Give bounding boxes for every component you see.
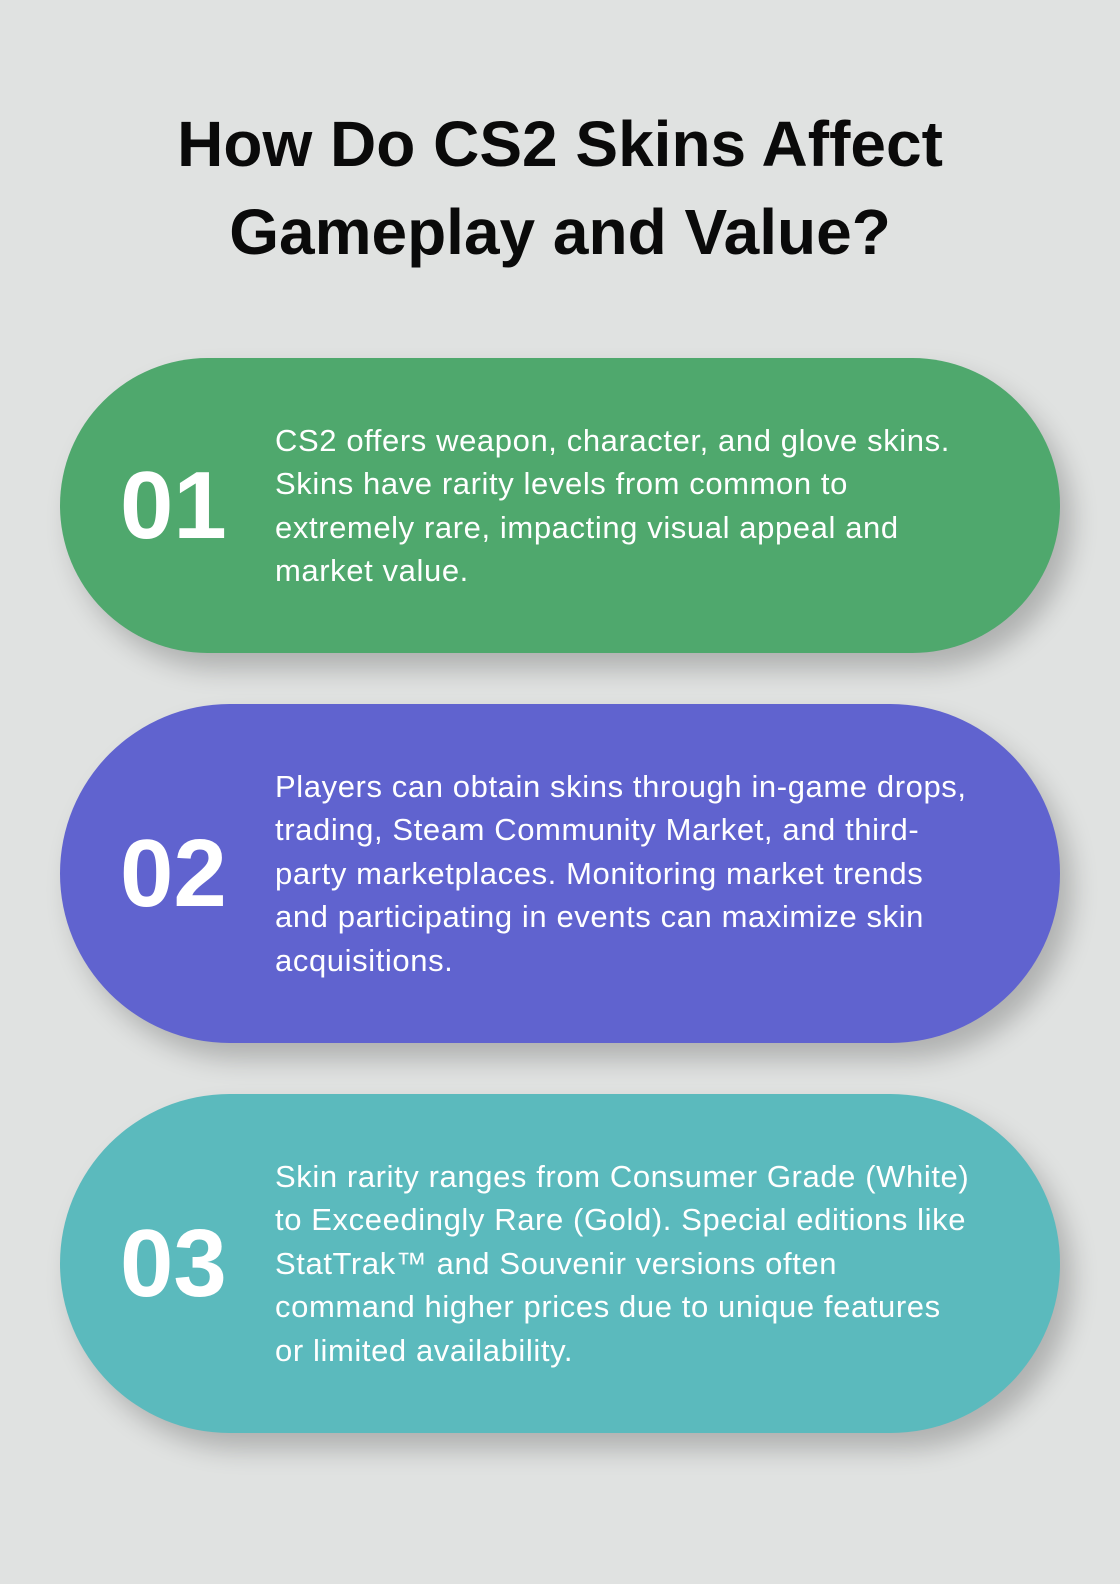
text block 01: market value. <box>275 553 469 588</box>
text block 01: extremely rare, impacting visual appeal and <box>275 510 899 544</box>
title <box>177 108 943 268</box>
text block 03 <box>275 1159 969 1368</box>
text block 01: Skins have rarity levels from common to <box>275 466 848 501</box>
text block 02: acquisitions. <box>275 943 453 978</box>
text block 03: Skin rarity ranges from Consumer Grade (White) <box>275 1159 969 1194</box>
panel: step 02 <box>60 704 1060 1043</box>
number 02: 02 <box>120 820 227 926</box>
text block 03: or limited availability. <box>275 1333 573 1368</box>
title: Gameplay and Value? <box>229 196 891 268</box>
text block 02: party marketplaces. Monitoring market trends <box>275 856 923 891</box>
text block 02: trading, Steam Community Market, and third- <box>275 812 919 847</box>
number 03: 03 <box>120 1210 227 1316</box>
text block 03: command higher prices due to unique features <box>275 1289 941 1324</box>
text block 02 <box>275 769 967 978</box>
text block 03: StatTrak™ and Souvenir versions often <box>275 1246 837 1281</box>
text block 02: Players can obtain skins through in-game drops, <box>275 769 967 804</box>
title: How Do CS2 Skins Affect <box>177 108 943 180</box>
text block 03: to Exceedingly Rare (Gold). Special editions like <box>275 1202 966 1237</box>
panel: step 01 <box>60 358 1060 653</box>
text block 01: CS2 offers weapon, character, and glove skins. <box>275 422 950 458</box>
panel: step 03 <box>60 1094 1060 1433</box>
number 01: 01 <box>120 452 227 558</box>
text block 02: and participating in events can maximize skin <box>275 899 924 934</box>
text block 01 <box>275 422 950 588</box>
